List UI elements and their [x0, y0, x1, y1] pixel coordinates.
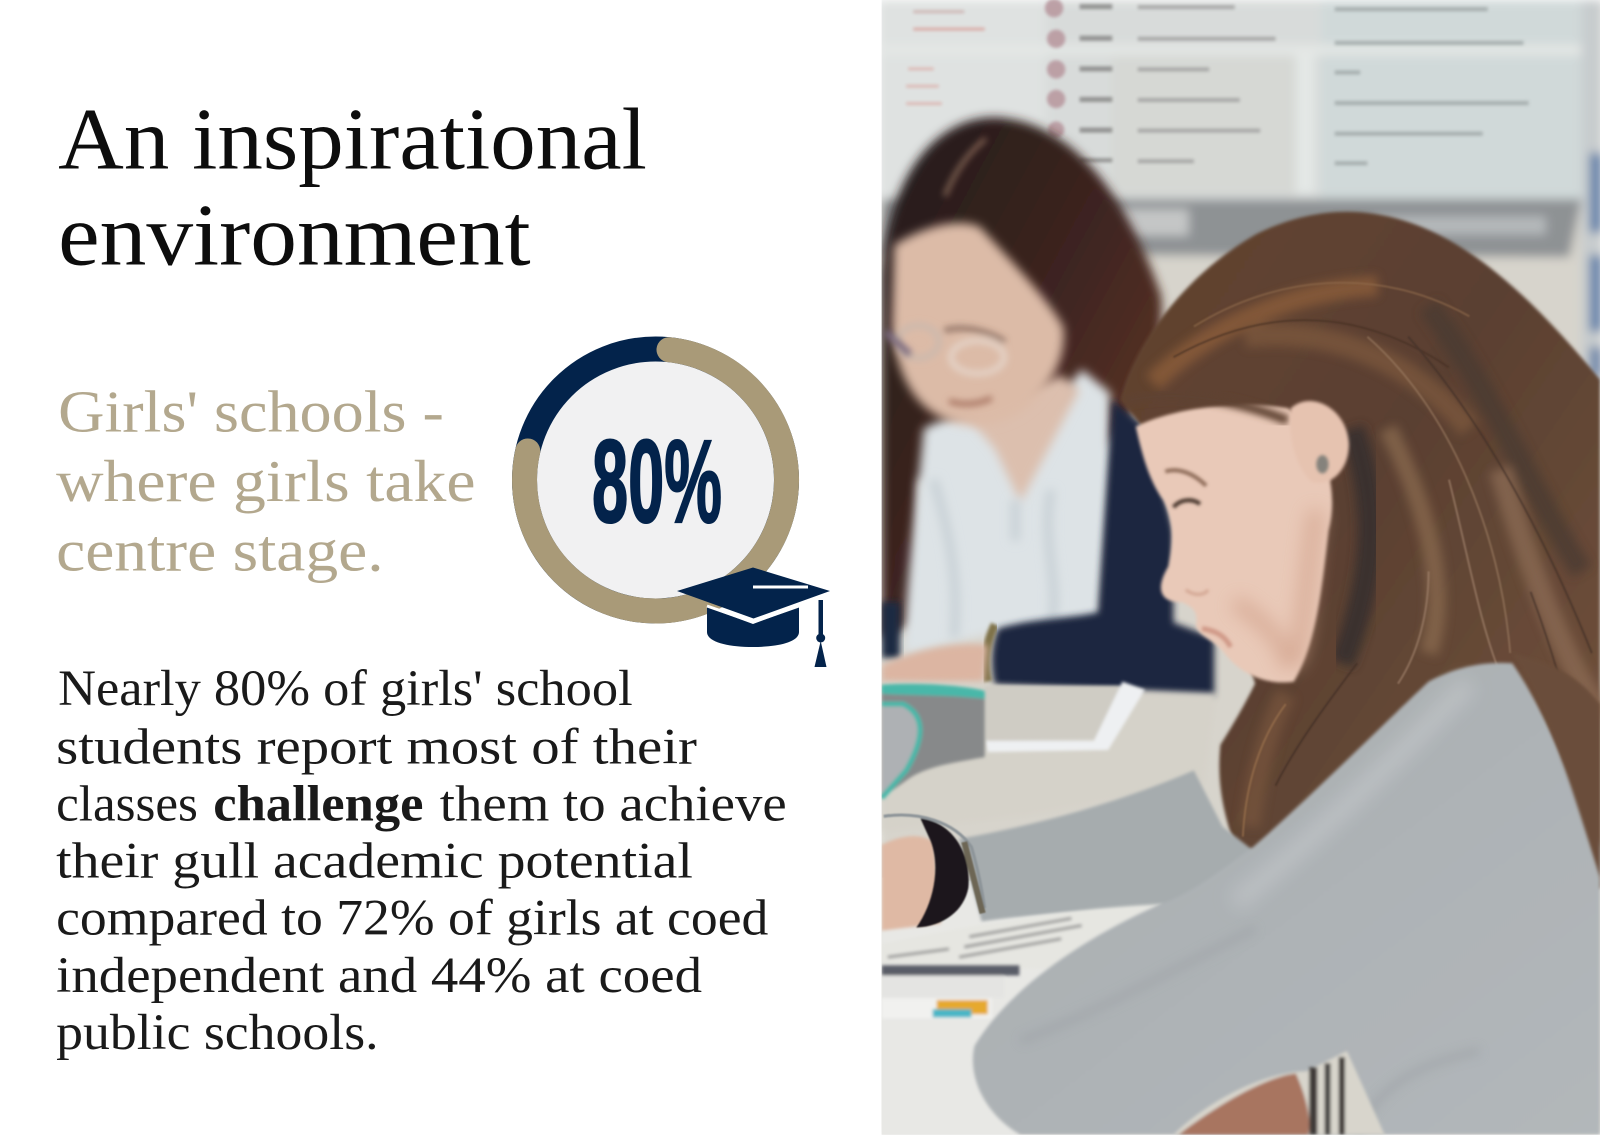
white highlight line [753, 586, 808, 588]
hair line across forehead [1206, 402, 1291, 426]
chair, hand and floor [1173, 1051, 1385, 1135]
cardigan left edge [882, 602, 900, 658]
dark hair behind ear [1342, 429, 1370, 663]
hair highlights and strands [1153, 286, 1600, 827]
front student's grey sweater [973, 663, 1600, 1135]
front student's ear [1290, 401, 1349, 483]
front student's hand [882, 836, 941, 931]
back student's white shirt [904, 369, 1110, 655]
desk surface [882, 682, 1216, 832]
cuff detail [986, 624, 995, 682]
front student [882, 212, 1600, 1135]
body paragraph [56, 661, 787, 1061]
subtitle: centre stage. [56, 517, 384, 583]
body paragraph: Nearly 80% of girls' school [58, 661, 633, 717]
pencil case [882, 684, 985, 798]
icon: graduation cap [677, 568, 830, 667]
lower desk surface [882, 880, 1047, 1132]
body paragraph: them to achieve [440, 776, 787, 832]
back student's eyes and glasses [886, 326, 1005, 404]
cheek and jaw shading [1235, 510, 1316, 668]
chevron white gap [707, 606, 799, 622]
body paragraph: classes [56, 776, 198, 832]
back student's hand [882, 644, 988, 684]
navy arc: 20% segment [524, 349, 786, 611]
title [58, 90, 647, 283]
back student's navy cardigan [992, 400, 1214, 696]
sweater folds [1020, 929, 1480, 1135]
title: environment [58, 186, 531, 283]
eye and brow [1165, 470, 1206, 507]
white text panel [0, 0, 882, 1135]
front student's face [1136, 405, 1332, 682]
front student's long hair [1120, 212, 1600, 918]
scrunchie and bracelets [884, 815, 985, 928]
body paragraph: independent and 44% at coed [56, 948, 702, 1004]
mortarboard [677, 568, 830, 618]
back student [882, 117, 1214, 696]
printed lines on paper [888, 918, 1082, 957]
body paragraph: compared to 72% of girls at coed [56, 891, 768, 947]
shirt shadow folds [934, 480, 1054, 638]
fine hair strands [1173, 283, 1598, 847]
classroom background with posters [878, 0, 1600, 1135]
blurred poster table rows [906, 0, 1529, 165]
back student's neck [964, 376, 1080, 502]
subtitle: where girls take [56, 448, 476, 514]
subtitle: Girls' schools - [58, 379, 444, 445]
subtitle [56, 379, 476, 583]
gold arc: 80% segment [525, 350, 787, 611]
back student's face [892, 223, 1064, 425]
photo: two students working at a desk [878, 0, 1600, 1135]
notebook on desk [985, 682, 1145, 752]
cap base [707, 607, 799, 647]
inner disc [536, 360, 776, 600]
donut chart: 80% [524, 349, 787, 611]
body paragraph: students report most of their [56, 719, 697, 775]
body paragraph: their gull academic potential [56, 834, 693, 890]
back student's hair parting [945, 139, 986, 196]
hair falling over shoulder [1512, 653, 1600, 878]
title: An inspirational [58, 90, 647, 187]
back student's long hair [882, 117, 1162, 638]
nostril and lips [1186, 590, 1231, 647]
body paragraph: public schools. [56, 1005, 379, 1061]
tassel [814, 600, 826, 667]
percentage label: 80% [592, 416, 722, 548]
open paper under arm [1027, 902, 1161, 917]
earplug [1316, 455, 1329, 473]
front student's sweater forearm [959, 770, 1255, 921]
body paragraph: challenge [213, 776, 423, 832]
sleeve highlight [1235, 684, 1469, 903]
stack of books [882, 965, 1019, 1018]
